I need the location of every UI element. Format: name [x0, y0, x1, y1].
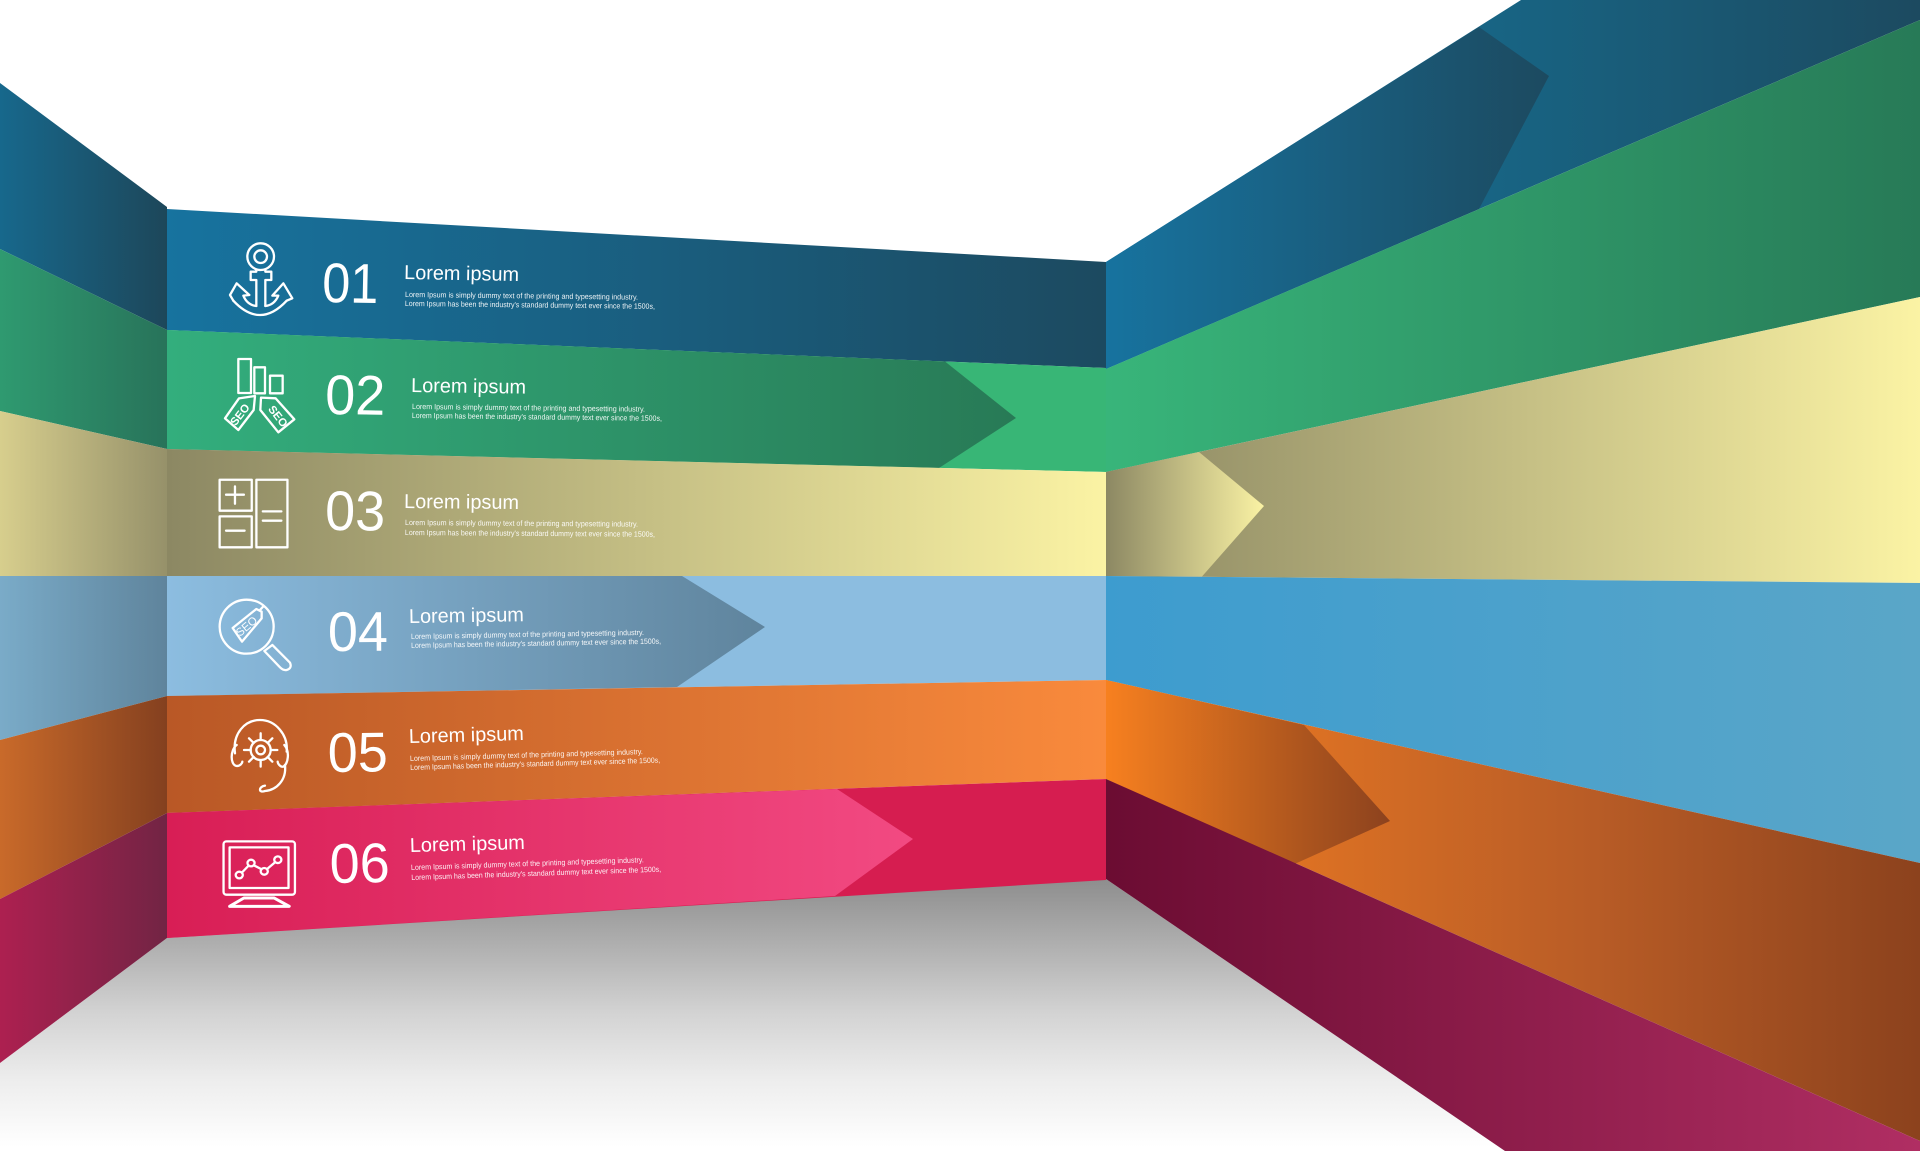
- row 01: [230, 243, 655, 315]
- left band 3: [0, 411, 167, 576]
- description 05: Lorem Ipsum is simply dummy text of the printing and typesetting industry.: [410, 747, 643, 763]
- row 05: [232, 720, 660, 791]
- number 04: 04: [328, 600, 388, 663]
- center arrow 4: [167, 576, 765, 696]
- floor: [0, 879, 1505, 1151]
- right arrow 3: [1106, 452, 1264, 576]
- description 01: Lorem Ipsum has been the industry's standard dummy text ever since the 1500s,: [405, 299, 655, 311]
- icon: SEO bars and tags: SEO: [229, 402, 253, 428]
- number 03: 03: [325, 479, 385, 543]
- center arrow 2: [167, 330, 1016, 468]
- center band 5: [167, 680, 1106, 813]
- heading 06: Lorem ipsum: [410, 832, 525, 857]
- heading 05: Lorem ipsum: [409, 723, 524, 748]
- left band 6: [0, 813, 167, 1063]
- row 03: [220, 479, 655, 547]
- center band 3: [167, 449, 1106, 576]
- description 01: [405, 290, 655, 311]
- heading 01: Lorem ipsum: [404, 262, 519, 286]
- panel: right wall: [1106, 0, 1920, 1151]
- description 03: [405, 518, 655, 539]
- heading 02: Lorem ipsum: [411, 375, 526, 399]
- icon: SEO magnifier: SEO: [234, 615, 260, 639]
- description 02: [412, 402, 662, 423]
- number 06: 06: [329, 831, 390, 895]
- description 04: Lorem Ipsum is simply dummy text of the printing and typesetting industry.: [411, 628, 644, 641]
- right band 5: [1106, 680, 1920, 1141]
- left band 1: [0, 83, 167, 330]
- left band 2: [0, 249, 167, 449]
- description 06: Lorem Ipsum is simply dummy text of the printing and typesetting industry.: [411, 855, 644, 872]
- description 04: [411, 628, 661, 650]
- center band 2: [167, 330, 1106, 472]
- center band 1: [167, 209, 1106, 368]
- description 05: Lorem Ipsum has been the industry's standard dummy text ever since the 1500s,: [410, 756, 660, 772]
- icon: SEO bars and tags: [225, 359, 294, 432]
- left band 5: [0, 696, 167, 899]
- heading 03: Lorem ipsum: [404, 491, 519, 514]
- number 05: 05: [327, 720, 388, 784]
- icon: headset with gear: [232, 720, 288, 791]
- row 06: [224, 831, 661, 906]
- description 04: Lorem Ipsum has been the industry's standard dummy text ever since the 1500s,: [411, 637, 661, 650]
- right band 4: [1106, 576, 1920, 863]
- right band 3: [1106, 297, 1920, 583]
- right arrow 5: [1106, 680, 1390, 864]
- icon: calculator: [220, 480, 287, 547]
- center band 6: [167, 779, 1106, 938]
- description 05: [410, 747, 660, 772]
- heading 04: Lorem ipsum: [409, 604, 524, 628]
- number 02: 02: [325, 363, 386, 427]
- icon: monitor with chart: [224, 841, 295, 906]
- right arrow 1: [1106, 27, 1549, 369]
- panel: left wall: [0, 83, 167, 1063]
- center arrow 6: [167, 789, 913, 938]
- icon: SEO bars and tags: SEO: [265, 404, 290, 430]
- description 03: Lorem Ipsum is simply dummy text of the printing and typesetting industry.: [405, 518, 638, 529]
- right band 6: [1106, 779, 1920, 1151]
- number 01: 01: [322, 251, 379, 315]
- row 04: [220, 600, 661, 670]
- left band 4: [0, 576, 167, 740]
- right band 2: [1106, 20, 1920, 472]
- panel: center wall: [167, 209, 1106, 938]
- description 02: Lorem Ipsum has been the industry's standard dummy text ever since the 1500s,: [412, 411, 662, 423]
- description 06: [411, 855, 661, 882]
- right band 1: [1106, 0, 1920, 369]
- row 02: [225, 359, 662, 432]
- center band 4: [167, 576, 1106, 696]
- description 01: Lorem Ipsum is simply dummy text of the printing and typesetting industry.: [405, 290, 638, 302]
- description 02: Lorem Ipsum is simply dummy text of the printing and typesetting industry.: [412, 402, 645, 414]
- description 03: Lorem Ipsum has been the industry's standard dummy text ever since the 1500s,: [405, 528, 655, 539]
- icon: SEO magnifier: [220, 600, 291, 670]
- description 06: Lorem Ipsum has been the industry's standard dummy text ever since the 1500s,: [411, 865, 661, 882]
- icon: anchor: [230, 243, 292, 315]
